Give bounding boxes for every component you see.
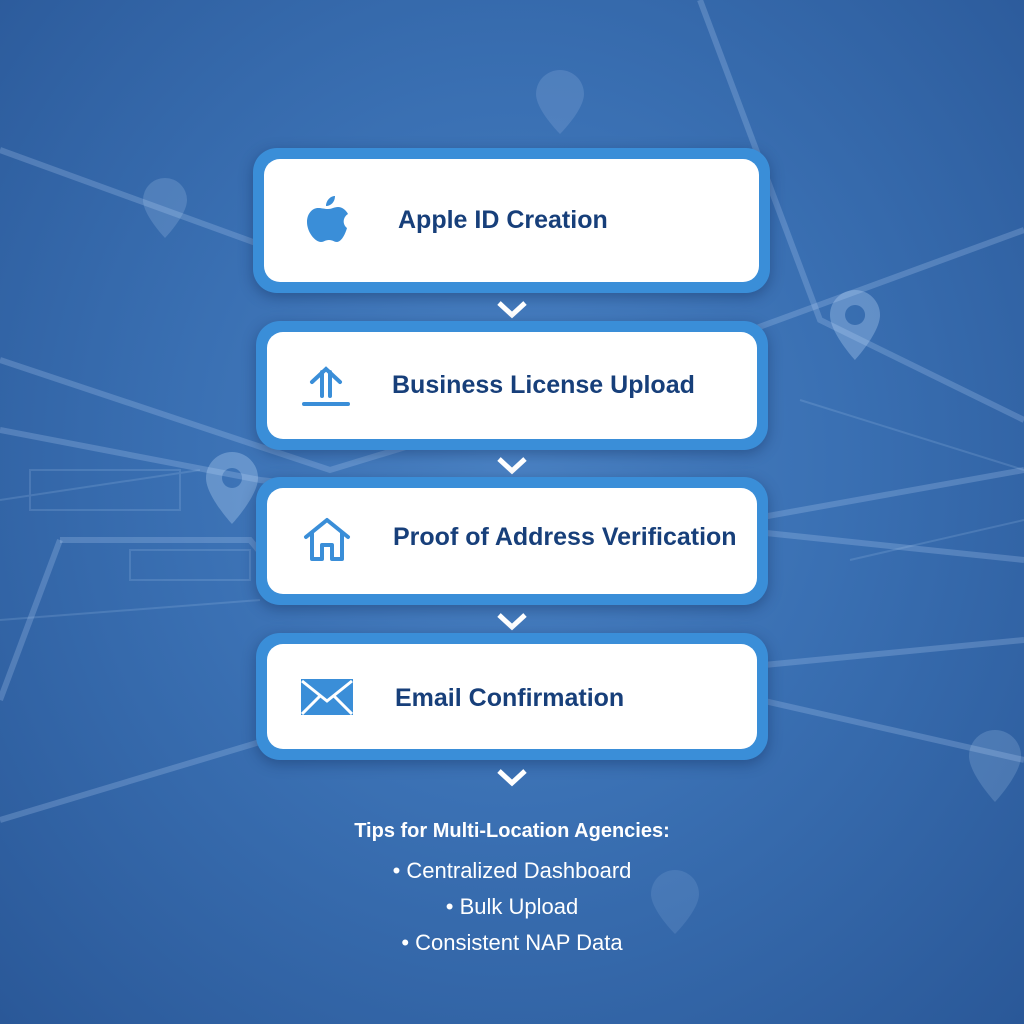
icon: upload: [302, 366, 350, 406]
arrow: [497, 769, 527, 786]
tips heading: Tips for Multi-Location Agencies:: [354, 820, 670, 842]
card: Email Confirmation: [256, 633, 768, 760]
icon: house: [304, 518, 350, 561]
label: Business License Upload: [392, 371, 695, 399]
tips list: • Centralized Dashboard: [393, 858, 631, 883]
tips list: • Consistent NAP Data: [401, 930, 623, 955]
arrow: [497, 613, 527, 630]
tips list: [393, 858, 631, 955]
arrow: [497, 457, 527, 474]
tips list: • Bulk Upload: [446, 894, 578, 919]
card: Business License Upload: [256, 321, 768, 450]
label: Email Confirmation: [395, 684, 624, 712]
card: Proof of Address Verification: [256, 477, 768, 605]
arrow: [497, 301, 527, 318]
icon: apple: [307, 196, 348, 242]
card: Apple ID Creation: [253, 148, 770, 293]
icon: envelope: [301, 679, 353, 715]
label: Apple ID Creation: [398, 206, 608, 234]
label: Proof of Address Verification: [393, 523, 737, 551]
